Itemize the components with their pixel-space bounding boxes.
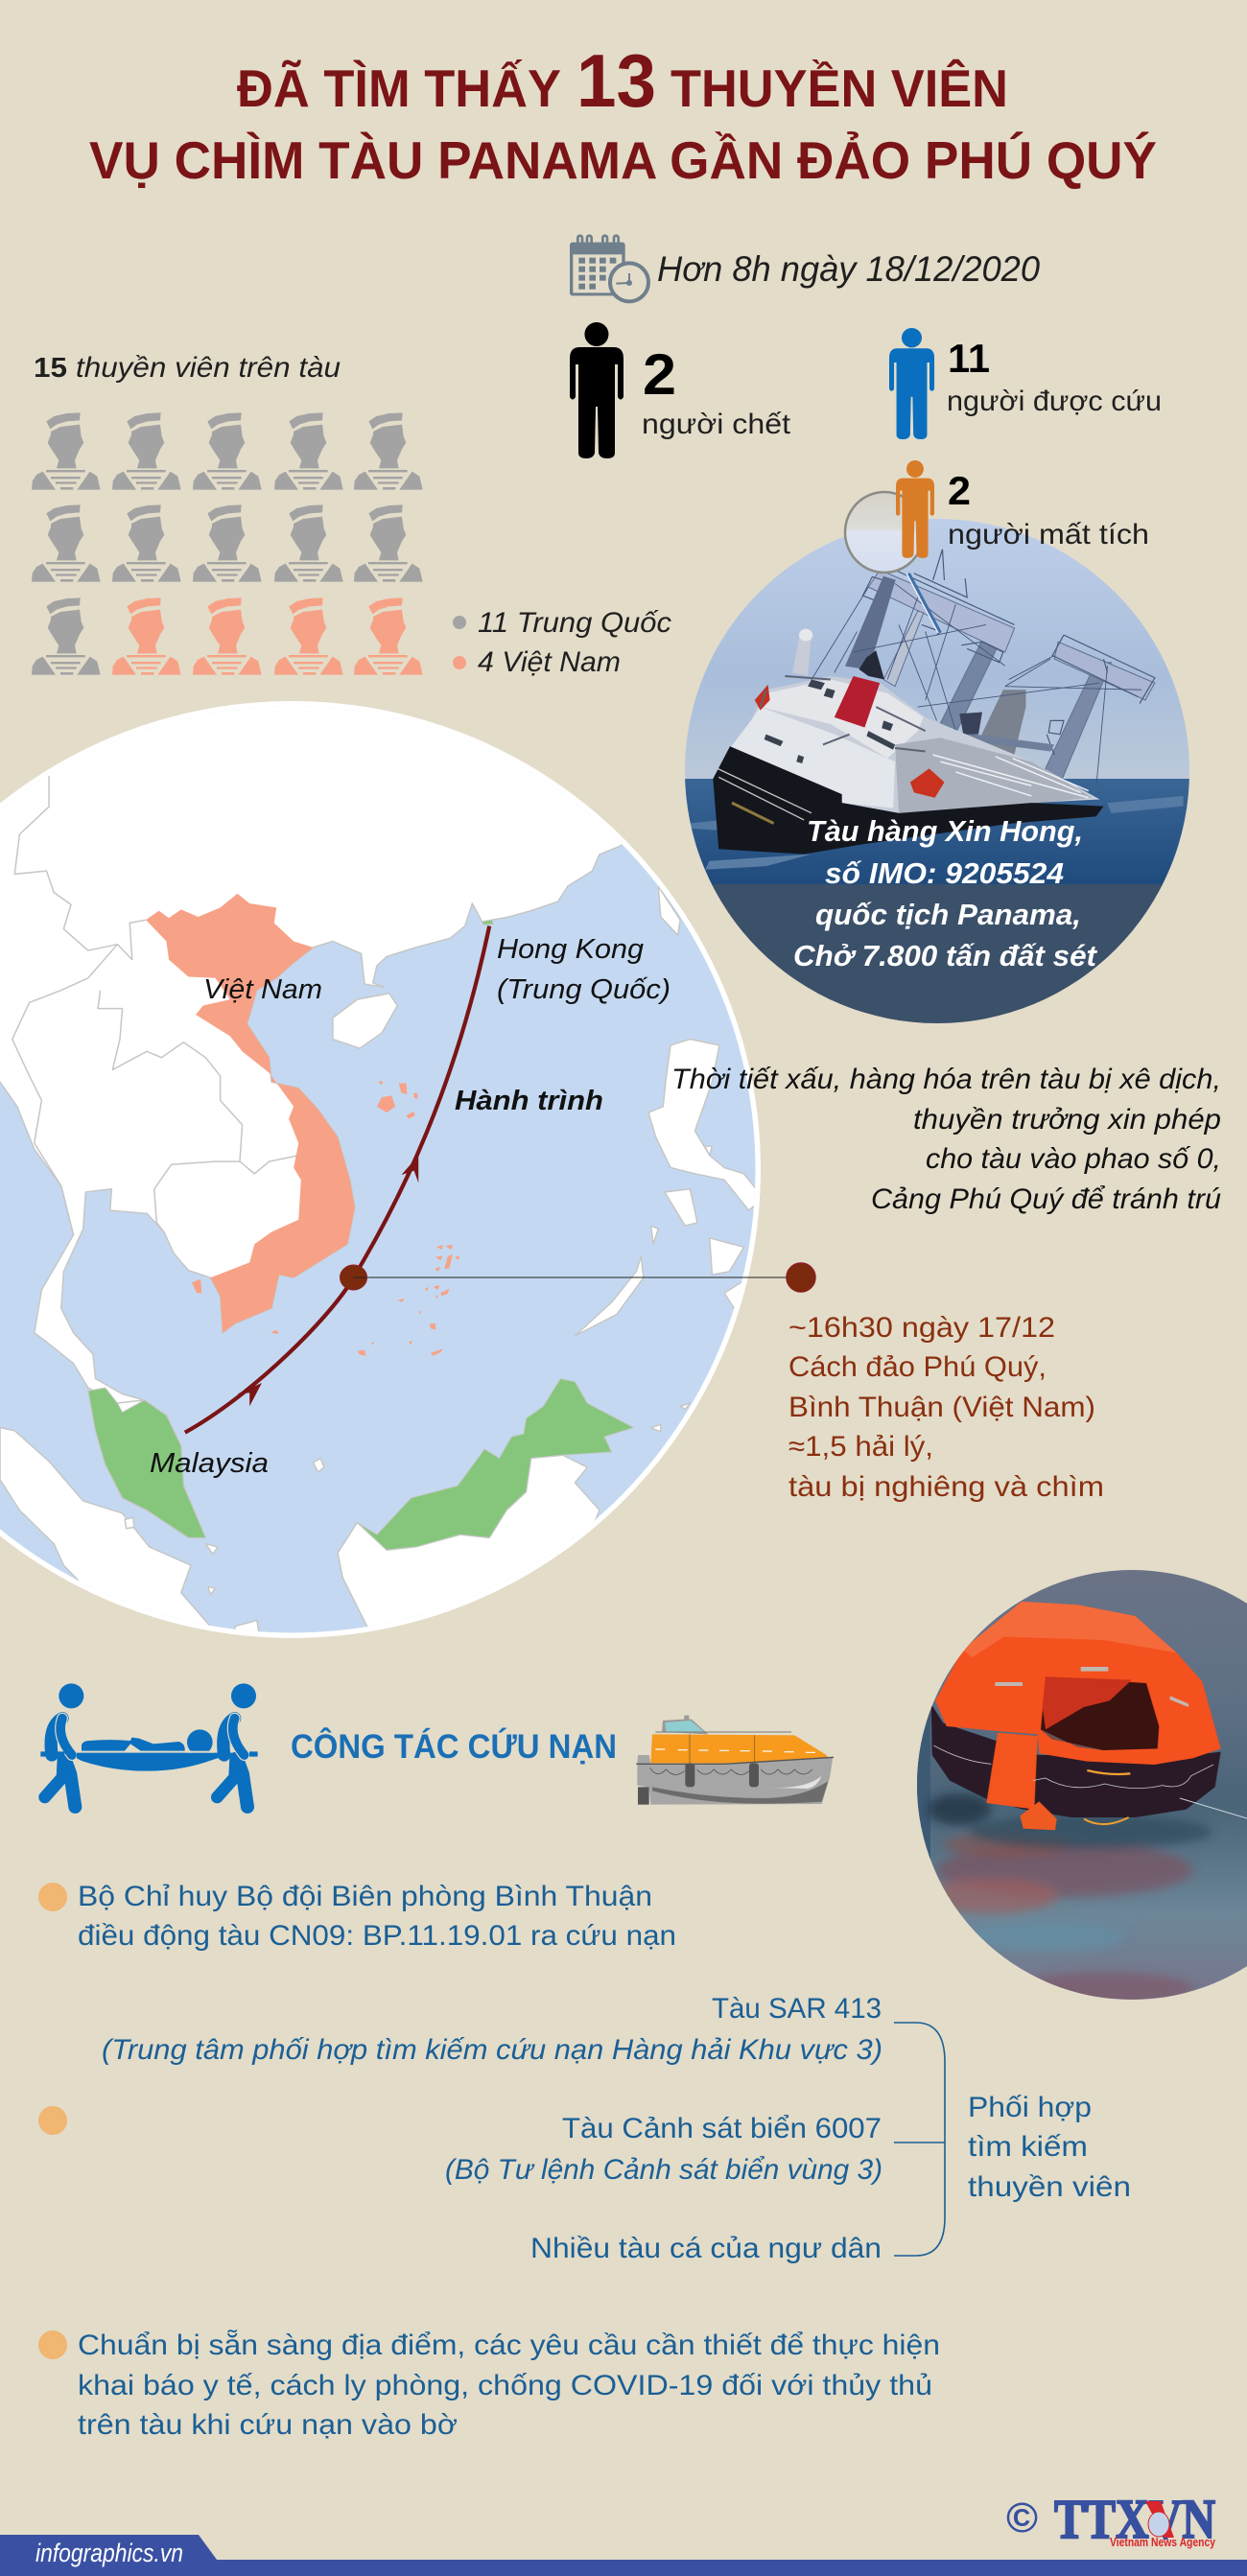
map globe <box>0 701 761 1638</box>
stat: 2 missing: người mất tích <box>948 519 1149 550</box>
water reflections <box>924 1793 1212 2004</box>
crew pictogram grid <box>32 412 423 675</box>
text: coordinate search for crew: tìm kiếm <box>968 2131 1088 2163</box>
ship caption <box>793 814 1098 972</box>
ship caption: Chở 7.800 tấn đất sét <box>793 939 1098 972</box>
list: participating vessels: Nhiều tàu cá của ngư dân <box>530 2233 882 2264</box>
map labels: (Trung Quốc) <box>497 974 671 1005</box>
canopy door <box>1041 1676 1159 1750</box>
stat: 2 dead: người chết <box>642 409 791 440</box>
title: VỤ CHÌM TÀU PANAMA GẦN ĐẢO PHÚ QUÝ <box>89 130 1157 190</box>
legend: nationality: 4 Việt Nam <box>478 646 621 678</box>
country: Malaysia <box>88 1379 634 1550</box>
text: coordinate search for crew: Phối hợp <box>968 2092 1092 2123</box>
ship caption: số IMO: 9205524 <box>825 856 1064 890</box>
caption band <box>712 884 1163 1023</box>
text: weather cause: thuyền trưởng xin phép <box>913 1104 1221 1136</box>
wires <box>812 584 1141 789</box>
windows <box>765 680 895 763</box>
bullet: covid preparation <box>38 2330 940 2441</box>
hull <box>713 746 1104 855</box>
superstructure <box>730 676 1100 813</box>
list: participating vessels: (Bộ Tư lệnh Cảnh sát biển vùng 3) <box>445 2154 882 2186</box>
ship photo illustration <box>671 508 1209 1028</box>
stat: 2 dead <box>570 322 791 458</box>
crane 2 <box>940 641 997 731</box>
route: journey line with arrows <box>185 926 489 1433</box>
list: participating vessels <box>102 1993 882 2264</box>
stat: 2 missing <box>896 460 1149 558</box>
crew count heading: 15 <box>34 353 67 384</box>
text: weather cause: Cảng Phú Quý để tránh trú <box>871 1183 1221 1215</box>
list: participating vessels: Tàu SAR 413 <box>712 1993 882 2025</box>
logo: TTXVN: TTXVN <box>1054 2488 1215 2550</box>
heading: rescue work: CÔNG TÁC CỨU NẠN <box>291 1727 617 1766</box>
stat: 11 rescued <box>889 328 1162 439</box>
text: coordinate search for crew: thuyền viên <box>968 2171 1131 2203</box>
text: sinking details: tàu bị nghiêng và chìm <box>788 1471 1104 1503</box>
stat: 11 rescued: 11 <box>948 336 990 381</box>
crew count heading: thuyền viên trên tàu <box>76 352 341 384</box>
icon: magnifier <box>845 492 940 633</box>
icon: calendar and clock <box>570 236 648 301</box>
text: sinking details <box>788 1312 1104 1503</box>
bullet: border guard <box>38 1881 676 1952</box>
bracket <box>894 2023 945 2256</box>
crane 3 <box>1045 662 1113 779</box>
text: sinking details: Bình Thuận (Việt Nam) <box>788 1392 1095 1423</box>
icon: rescue boat <box>636 1716 834 1805</box>
logo: TTXVN: © <box>1006 2494 1038 2541</box>
land masses <box>0 685 764 1651</box>
logo: TTXVN: Vietnam News Agency <box>1110 2535 1216 2549</box>
text: sinking details: Cách đảo Phú Quý, <box>788 1351 1047 1383</box>
stat: 2 dead: 2 <box>643 342 676 407</box>
footer bar <box>0 2535 1247 2576</box>
map <box>0 685 815 1651</box>
bullet: covid preparation: trên tàu khi cứu nạn vào bờ <box>78 2409 458 2441</box>
bullet: border guard: điều động tàu CN09: BP.11.19.01 ra cứu nạn <box>78 1920 676 1952</box>
text: sinking details: ~16h30 ngày 17/12 <box>788 1312 1055 1344</box>
map labels: Malaysia <box>150 1448 269 1479</box>
funnel <box>981 690 1026 755</box>
raft base <box>931 1704 1221 1817</box>
bullet: covid preparation: khai báo y tế, cách ly phòng, chống COVID-19 đối với thủy thủ <box>78 2370 932 2401</box>
date text: Hơn 8h ngày 18/12/2020 <box>657 249 1040 289</box>
country: Vietnam <box>146 894 460 1356</box>
canopy <box>935 1602 1221 1765</box>
bullet: search coordination <box>38 2106 67 2135</box>
list: participating vessels: Tàu Cảnh sát biển 6007 <box>562 2113 882 2144</box>
legend: nationality: 11 Trung Quốc <box>478 607 671 639</box>
bullet: covid preparation: Chuẩn bị sẵn sàng địa điểm, các yêu cầu cần thiết để thực hiện <box>78 2330 940 2361</box>
stat: 11 rescued: người được cứu <box>947 386 1162 417</box>
footer site name: infographics.vn <box>35 2539 183 2567</box>
map labels: Việt Nam <box>203 974 322 1005</box>
title: THUYỀN VIÊN <box>671 59 1008 118</box>
map labels <box>150 934 671 1479</box>
icon: stretcher carriers <box>40 1683 258 1807</box>
ship caption: Tàu hàng Xin Hong, <box>807 814 1083 848</box>
map labels: Hành trình <box>455 1086 603 1116</box>
logo: TTXVN <box>1006 2488 1216 2550</box>
title <box>89 38 1157 190</box>
legend: nationality <box>453 607 671 678</box>
ship caption: quốc tịch Panama, <box>815 898 1081 931</box>
stat: 2 missing: 2 <box>948 468 971 513</box>
title: 13 <box>576 38 656 123</box>
liferaft photo illustration <box>911 1563 1247 2004</box>
text: weather cause: cho tàu vào phao số 0, <box>926 1143 1221 1175</box>
text: sinking details: ≈1,5 hải lý, <box>788 1431 933 1463</box>
map labels: Hong Kong <box>497 934 644 965</box>
leader line and sinking location markers <box>340 1263 815 1292</box>
text: weather cause <box>671 1064 1221 1215</box>
list: participating vessels: (Trung tâm phối hợp tìm kiếm cứu nạn Hàng hải Khu vực 3) <box>102 2034 882 2066</box>
text: coordinate search for crew <box>968 2092 1131 2203</box>
text: weather cause: Thời tiết xấu, hàng hóa trên tàu bị xê dịch, <box>671 1064 1221 1095</box>
bullet: border guard: Bộ Chỉ huy Bộ đội Biên phòng Bình Thuận <box>78 1881 652 1912</box>
title: ĐÃ TÌM THẤY <box>237 59 561 118</box>
crane 1 post <box>846 576 895 669</box>
